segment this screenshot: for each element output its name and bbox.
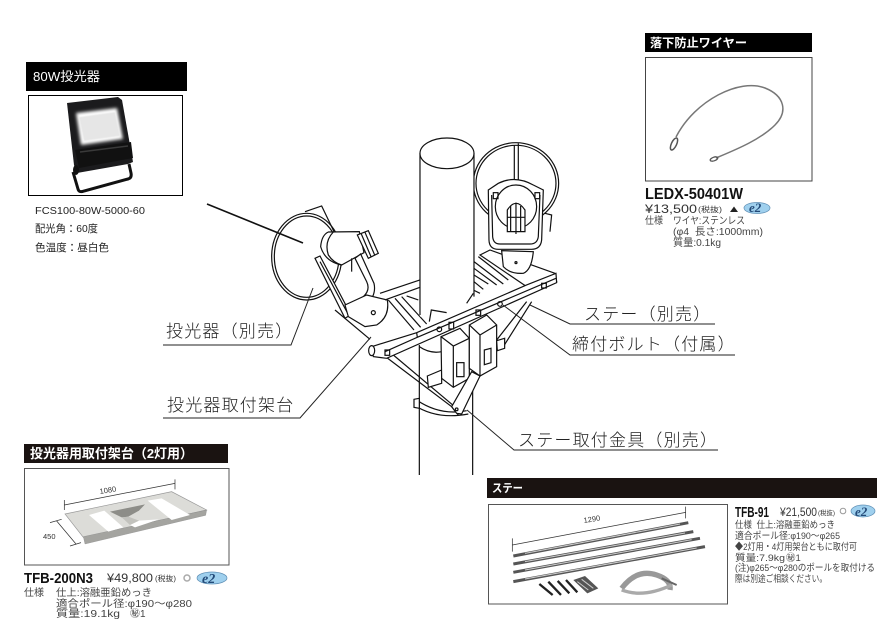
product photo: stay bars, bolts and clamp (488, 504, 728, 604)
specifications: 仕上:溶融亜鉛めっき (56, 586, 152, 599)
specifications: 質量:7.9kg (735, 552, 785, 564)
specifications: 質量:19.1kg (56, 607, 120, 620)
right floodlight (473, 143, 559, 287)
specifications: 際は別途ご相談ください。 (735, 573, 827, 585)
heading: stay: ステー (492, 482, 523, 495)
product name and price: e2 (855, 504, 868, 519)
heading: safety wire: 落下防止ワイヤー (650, 35, 747, 50)
product name and price: e2 (202, 572, 215, 587)
specifications: ㊙1 (786, 553, 801, 564)
product photo: mounting frame with dimensions: 450 (43, 532, 56, 541)
product name and price: LEDX-50401W (645, 186, 743, 203)
product name and price: (税抜) (818, 508, 835, 517)
callout: stay sold separately: ステー（別売） (584, 305, 711, 324)
callout: stay sold separately (530, 305, 715, 324)
heading: safety wire (645, 33, 812, 52)
panel: mounting frame product (24, 444, 229, 620)
product photo: floodlight (28, 96, 182, 196)
product name and price: (税抜) (698, 204, 723, 214)
specifications: 質量:0.1kg (673, 236, 721, 249)
panel: 80W floodlight (26, 62, 187, 254)
mounting frame lattice behind pole (380, 257, 508, 330)
panel: safety wire (644, 33, 812, 249)
callout: floodlight sold separately (163, 288, 313, 345)
product photo: mounting frame with dimensions: 1080 (99, 484, 117, 496)
product name and price (735, 504, 875, 521)
pole (420, 138, 474, 322)
specifications: 適合ポール径:φ190〜φ280 (56, 597, 192, 610)
specifications: ◆2灯用・4灯用架台ともに取付可 (735, 541, 857, 553)
specifications (24, 586, 192, 620)
specifications: 適合ポール径:φ190〜φ265 (735, 530, 840, 542)
specifications (735, 519, 875, 585)
product photo: mounting frame with dimensions (24, 468, 229, 565)
product name and price: ¥21,500 (779, 507, 817, 519)
specifications: ㊙1 (130, 608, 146, 620)
product specifications: 色温度：昼白色 (35, 241, 110, 254)
product name and price: TFB-91 (735, 505, 769, 521)
specifications: ワイヤ:ステンレス (673, 216, 745, 227)
heading: 80W floodlight: 80W投光器 (33, 69, 100, 84)
product specifications (35, 205, 145, 254)
leader line pointing to floodlight (207, 204, 303, 243)
specifications: 仕様 仕上:溶融亜鉛めっき (735, 519, 835, 531)
front beam of mounting frame (335, 273, 557, 358)
product photo: wire (646, 58, 812, 181)
product specifications: FCS100-80W-5000-60 (35, 205, 145, 217)
heading: mounting frame (24, 444, 228, 463)
product name and price: ¥49,800 (106, 571, 153, 585)
heading: mounting frame: 投光器用取付架台（2灯用） (30, 446, 193, 461)
callout: stay mounting bracket sold separately: ステー取付金具（別売） (518, 431, 718, 450)
panel: stay product (487, 478, 877, 604)
specifications: 仕様 (24, 586, 44, 599)
specifications (645, 214, 763, 249)
product name and price: (税抜) (155, 573, 177, 583)
callout: fastening bolt included (503, 305, 736, 355)
main diagram: pole with floodlights and mounting frame (272, 138, 559, 475)
specifications: (φ4 長さ:1000mm) (673, 226, 763, 238)
product name and price (644, 186, 770, 216)
left floodlight (272, 206, 388, 327)
heading: stay (487, 478, 877, 498)
callout: stay mounting bracket sold separately (467, 410, 718, 450)
specifications: (注)φ265〜φ280のポールを取付ける (735, 562, 875, 574)
lower pole with boxes, stay and clamp (383, 302, 532, 475)
callout: floodlight mounting frame: 投光器取付架台 (167, 396, 294, 415)
product specifications: 配光角：60度 (35, 222, 98, 235)
specifications: 仕様 (645, 214, 663, 227)
product name and price: TFB-200N3 (24, 571, 93, 587)
product name and price: ¥13,500 (644, 202, 697, 216)
callout: fastening bolt included: 締付ボルト（付属） (572, 335, 736, 354)
heading: 80W floodlight (26, 62, 187, 91)
product photo: stay bars, bolts and clamp: 1290 (583, 513, 601, 525)
callout: floodlight sold separately: 投光器（別売） (166, 322, 293, 341)
product name and price: e2 (749, 200, 762, 215)
product name and price (24, 571, 227, 587)
callout: floodlight mounting frame (163, 337, 371, 418)
